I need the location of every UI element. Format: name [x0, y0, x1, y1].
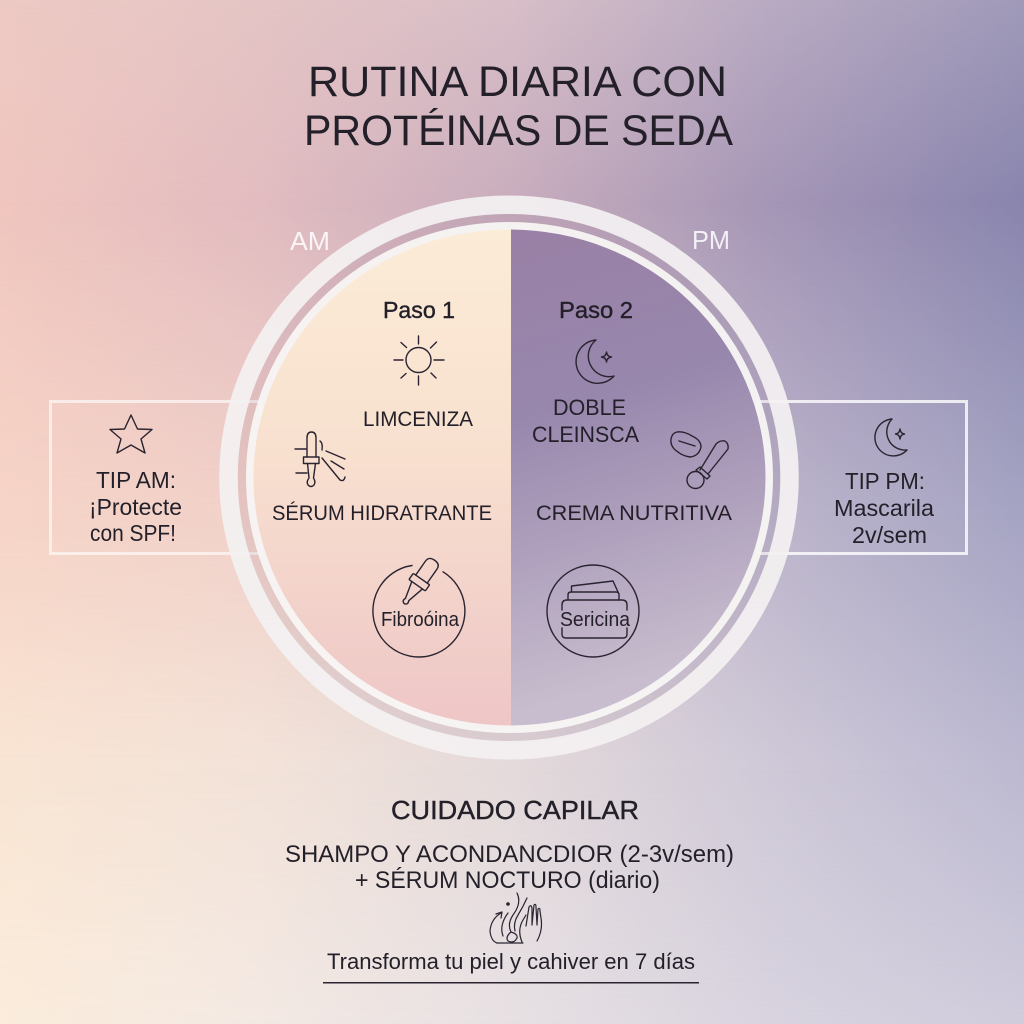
title: [304, 58, 733, 155]
heading: hair care: CUIDADO CAPILAR: [391, 795, 639, 825]
step: Doble cleinsca: DOBLE: [553, 395, 626, 420]
title: PROTÉINAS DE SEDA: [304, 107, 733, 155]
text: tip AM: TIP AM:: [96, 467, 176, 493]
heading: Paso 1: Paso 1: [383, 297, 455, 323]
text: tip PM: Mascarila: [834, 495, 934, 521]
icon: Fibroina badge: Fibroóina: [381, 609, 460, 631]
step: Doble cleinsca: [532, 395, 639, 447]
icon: hand and hair: [490, 893, 542, 943]
tagline: Transforma tu piel y cahiver en 7 días: [327, 949, 695, 974]
text: tip AM: con SPF!: [90, 520, 176, 546]
icon: sun: [394, 336, 444, 385]
inner ring: [250, 226, 769, 729]
step: Limceniza: LIMCENIZA: [363, 407, 474, 431]
icon: star: [110, 415, 152, 453]
step: Doble cleinsca: CLEINSCA: [532, 422, 639, 447]
icon: moon: [576, 340, 614, 383]
icon: sparkle: [506, 902, 510, 906]
ring gap tint: [238, 212, 782, 742]
PM half: [511, 230, 766, 726]
icon: moon: [875, 419, 907, 456]
AM half: [254, 230, 511, 726]
text: hair care routine: [285, 841, 734, 894]
icon: Sericina badge: Sericina: [560, 609, 631, 631]
text: tip AM: [89, 467, 182, 546]
icon: pill and dropper: [671, 432, 728, 488]
heading: Paso 2: Paso 2: [559, 297, 633, 323]
text: tip AM: ¡Protecte: [89, 494, 182, 520]
icon: Fibroina badge: [373, 555, 465, 657]
label AM: AM: [290, 228, 330, 256]
icon: serum dropper: [295, 432, 345, 486]
tagline underline: [323, 982, 699, 984]
circular clock: [228, 205, 790, 750]
title: RUTINA DIARIA CON: [308, 58, 727, 106]
step: Serum hidratante: SÉRUM HIDRATRANTE: [272, 500, 492, 525]
text: hair care routine: + SÉRUM NOCTURO (diario): [355, 867, 660, 894]
text: tip PM: 2v/sem: [852, 522, 927, 548]
outer ring: [228, 205, 790, 750]
panel: tip AM: [50, 402, 260, 554]
panel: tip PM: [758, 402, 966, 554]
label PM: PM: [692, 227, 730, 255]
text: tip PM: [834, 468, 934, 548]
step: Crema nutritiva: CREMA NUTRITIVA: [536, 501, 733, 525]
text: tip PM: TIP PM:: [845, 468, 925, 494]
icon: Sericina badge: [547, 565, 639, 657]
text: hair care routine: SHAMPO Y ACONDANCDIOR (2-3v/sem): [285, 841, 734, 868]
